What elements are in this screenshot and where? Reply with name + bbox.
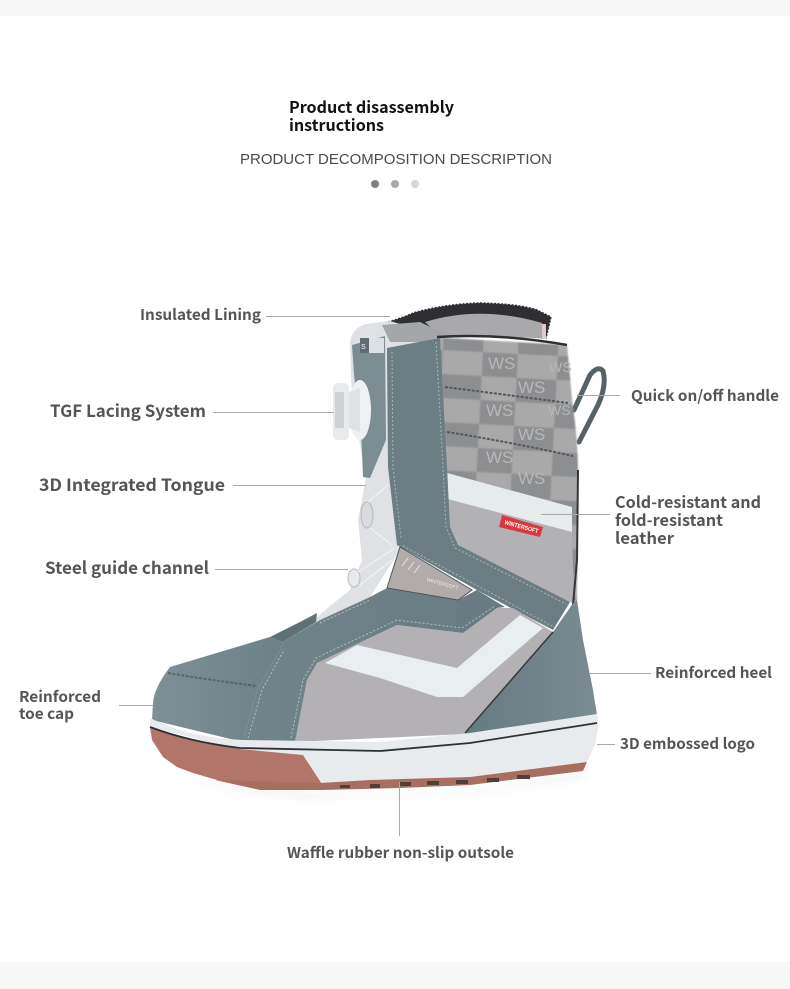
lace guides [348,485,395,587]
label: Waffle rubber non-slip outsole: Waffle rubber non-slip outsole [287,842,514,863]
upper tongue flap [352,336,386,478]
size tag [360,338,384,353]
label: Cold-resistant and fold-resistant leather: leather [615,525,674,549]
label: 3D embossed logo: 3D embossed logo [620,733,755,754]
label: Cold-resistant and fold-resistant leather [541,489,761,549]
size tag: S [361,344,366,351]
label: Cold-resistant and fold-resistant leather: fold-resistant [615,507,723,531]
label: Quick on/off handle: Quick on/off handle [631,385,779,406]
WS marks: WS [486,401,513,420]
label: Reinforced toe cap: Reinforced [19,686,101,707]
outsole strip [215,762,587,790]
logo tab: WINTERSOFT [425,577,459,591]
logo tab [387,547,472,600]
shaft right edge [557,470,578,630]
top band [0,0,790,16]
large lace dial [333,380,371,440]
handle loop [574,369,604,442]
WS marks: WS [549,359,572,375]
inner lining [425,314,546,338]
WS marks: WS [518,469,545,488]
WS marks [486,354,572,488]
lower shaft panel [440,495,574,603]
label: TGF Lacing System: TGF Lacing System [50,397,206,422]
pagination dots [371,180,419,188]
WS marks: WS [548,402,571,418]
label: Cold-resistant and fold-resistant leather: Cold-resistant and [615,489,761,513]
toe cap [152,637,283,742]
red brand label: WINTERSOFT [503,520,539,535]
WS marks: WS [486,448,513,467]
vertical strap [387,338,570,630]
title: instructions [289,112,384,136]
shaft checker panel [430,337,578,603]
bottom band [0,962,790,989]
label: Reinforced heel: Reinforced heel [655,662,772,683]
red brand label [499,515,543,537]
boot illustration [150,303,604,798]
toe seam [168,673,257,686]
label: 3D Integrated Tongue: 3D Integrated Tongue [39,471,225,496]
WS marks: WS [518,378,545,397]
strap stitching [392,342,566,626]
label: Reinforced toe cap: toe cap [19,703,74,724]
heel seam [465,632,553,733]
tongue [300,321,440,632]
WS marks: WS [488,354,515,373]
fur collar [388,303,551,338]
subtitle: PRODUCT DECOMPOSITION DESCRIPTION [240,152,552,168]
red lining tag [542,324,546,339]
heel counter [465,600,597,734]
label: Insulated Lining: Insulated Lining [140,304,261,325]
lower side panel [295,608,553,742]
title [289,94,454,136]
WS marks: WS [518,425,545,444]
black foxing line [150,723,597,751]
ground shadow [190,772,585,798]
white midsole [150,714,598,783]
outsole lugs [340,775,530,788]
quilting seams [445,387,573,456]
label: Steel guide channel: Steel guide channel [45,554,209,579]
white chevron stripe [325,615,543,697]
collar rim [437,336,567,345]
vamp stitching [248,600,495,738]
collar band [382,322,445,342]
outsole toe wedge [150,727,322,787]
lace flap detail [270,613,317,642]
white shaft stripe [440,471,572,532]
label: Reinforced toe cap [19,686,153,724]
title: Product disassembly [289,94,454,118]
vamp band [243,588,505,742]
